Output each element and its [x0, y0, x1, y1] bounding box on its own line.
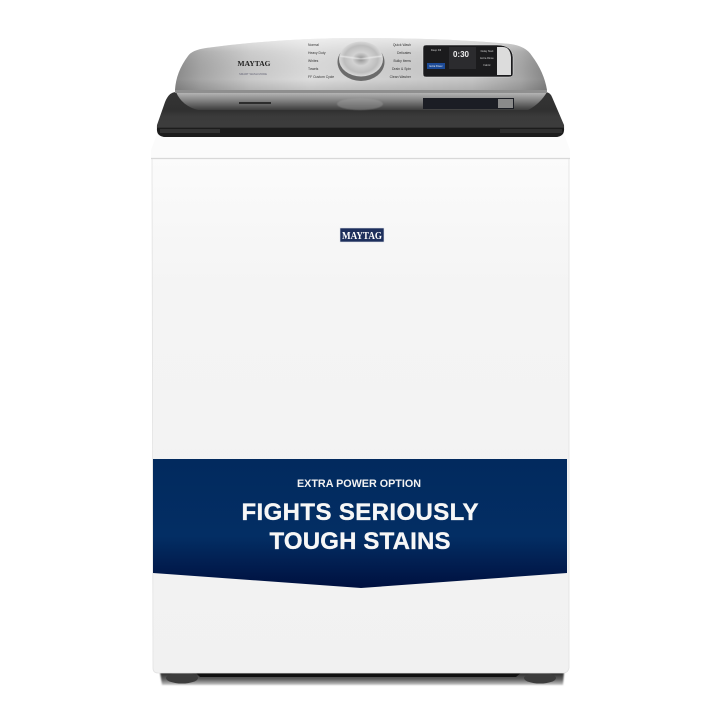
right cycle labels: Bulky Items: [393, 59, 411, 63]
lid console reflection: [176, 92, 547, 110]
digital control display: [423, 45, 513, 77]
cabinet body: [152, 158, 569, 673]
right cycle labels: Clean Washer: [390, 75, 412, 79]
banner headline: FIGHTS SERIOUSLY: [242, 499, 478, 526]
left cycle labels: Towels: [308, 67, 319, 71]
right cycle labels: [390, 43, 412, 79]
cabinet top edge line: [151, 158, 570, 160]
banner headline: TOUGH STAINS: [270, 528, 450, 555]
control console: [175, 38, 547, 93]
cycle selector dial: [338, 42, 384, 81]
left cycle labels: [308, 43, 334, 79]
right cycle labels: Drain & Spin: [392, 67, 411, 71]
banner headline: [242, 499, 478, 555]
left cycle labels: Normal: [308, 43, 319, 47]
digital control display: Deep Fill: [431, 48, 442, 52]
right cycle labels: Delicates: [397, 51, 411, 55]
feature banner: [153, 459, 567, 588]
digital control display: 0:30: [453, 50, 470, 59]
reflected dial: [337, 98, 383, 110]
floor shadow and feet: [160, 672, 564, 685]
console sub label: SMART WASH MODE: [239, 72, 267, 76]
left cycle labels: FF Custom Cycle: [308, 75, 334, 79]
reflected display: [423, 98, 514, 109]
cabinet top panel: [151, 134, 570, 158]
reflected brand: [239, 102, 271, 104]
digital control display: Extra Power: [429, 65, 443, 68]
black glass lid: [157, 92, 564, 137]
digital control display: Extra Rinse: [480, 56, 494, 60]
brand logo on console: MAYTAG: [238, 59, 271, 68]
digital control display: Delay Start: [481, 49, 494, 53]
left cycle labels: Whites: [308, 59, 319, 63]
left cycle labels: Heavy Duty: [308, 51, 326, 55]
banner eyebrow: EXTRA POWER OPTION: [297, 478, 421, 490]
digital control display: Fabric: [483, 63, 491, 67]
lid handle strip: [157, 128, 564, 137]
brand badge: MAYTAG: [342, 231, 382, 242]
right cycle labels: Quick Wash: [393, 43, 411, 47]
